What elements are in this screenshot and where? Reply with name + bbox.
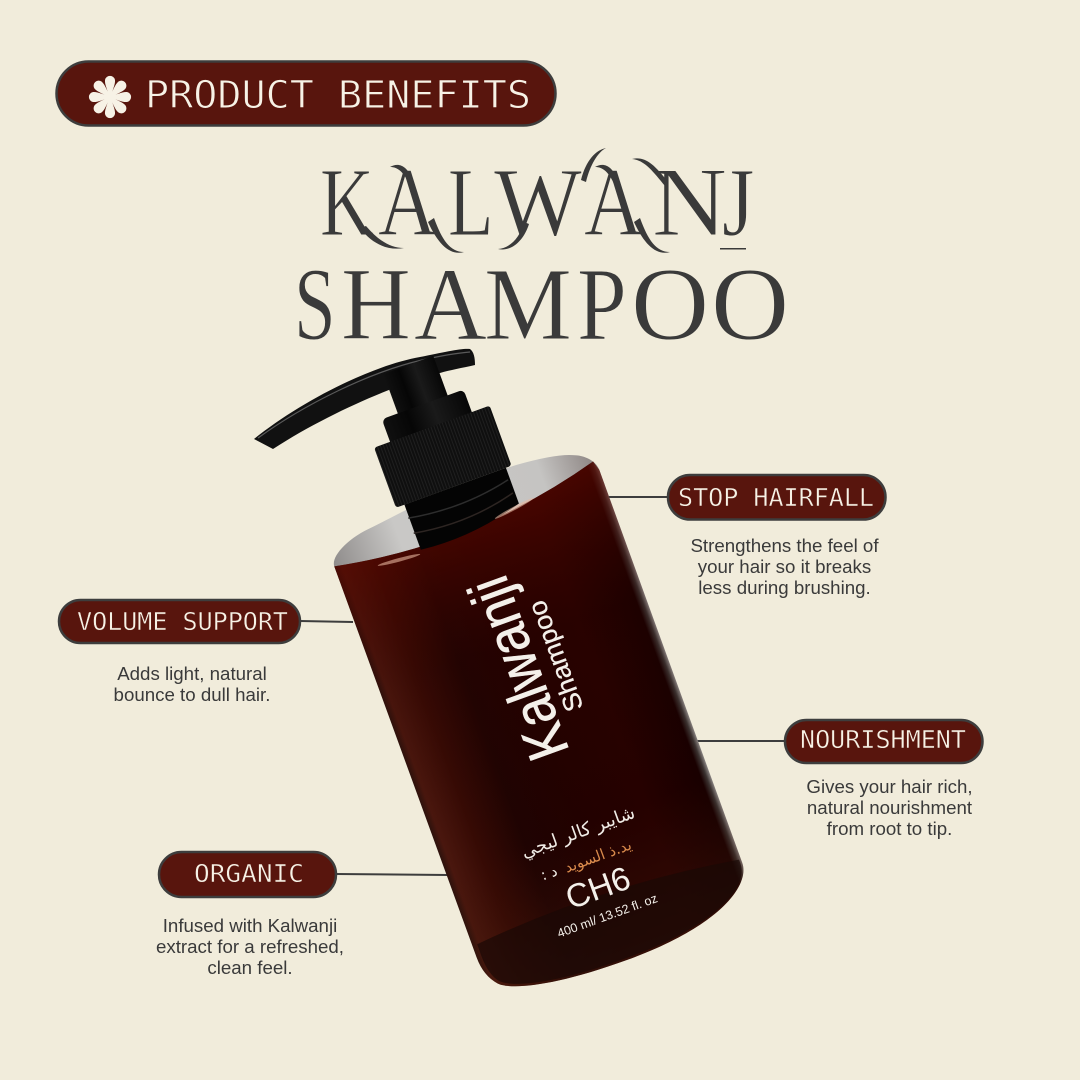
product: shampoo bottle: [254, 316, 760, 1008]
benefit: stop hairfall: Strengthens the feel of: [690, 535, 879, 556]
shoulder highlights: [373, 496, 539, 571]
benefit: volume support: VOLUME SUPPORT: [77, 607, 288, 636]
title line: Shampoo: O: [631, 246, 709, 362]
label: arabic subtitle: يد.ذ السويد: [562, 836, 634, 876]
bottle shoulder: [323, 438, 605, 581]
label: arabic name: شايبر كالر ليجي: [518, 802, 638, 863]
benefit: stop hairfall: [668, 475, 886, 598]
benefit: organic: clean feel.: [207, 957, 293, 978]
benefit: organic: Infused with Kalwanji: [163, 915, 337, 936]
benefit: volume support: bounce to dull hair.: [114, 684, 270, 705]
benefit: organic: [156, 852, 344, 978]
benefit: stop hairfall: your hair so it breaks: [698, 556, 871, 577]
title line: Shampoo: M: [484, 247, 572, 362]
label: volume: 400 ml/ 13.52 fl. oz: [555, 891, 659, 941]
benefit: nourishment: [785, 720, 982, 839]
label: arabic mark: : د: [538, 862, 560, 884]
pump actuator: [254, 349, 475, 449]
label: CH6: CH6: [560, 859, 635, 916]
title line: Shampoo: A: [414, 248, 487, 362]
title swashes: [360, 148, 746, 253]
header text: PRODUCT BENEFITS: [145, 73, 531, 117]
benefit: volume support: Adds light, natural: [117, 663, 267, 684]
title line: Shampoo: O: [711, 246, 789, 362]
benefit: stop hairfall: less during brushing.: [698, 577, 871, 598]
benefit: nourishment: natural nourishment: [807, 797, 973, 818]
pump neck: [403, 468, 523, 552]
title line: Kalwanj: L: [448, 147, 493, 256]
title line: Kalwanj: [320, 147, 754, 257]
benefit: nourishment: Gives your hair rich,: [806, 776, 973, 797]
body tint: [331, 461, 760, 1008]
pump stem and collar: [351, 344, 512, 508]
title line: Kalwanj: A: [378, 147, 437, 257]
title: [294, 147, 789, 362]
title line: Kalwanj: J: [722, 148, 754, 257]
label: Kalwanji: Kalwanji: [456, 568, 582, 769]
title line: Kalwanj: K: [320, 147, 374, 256]
icon: flower: [89, 76, 131, 118]
title line: Kalwanj: W: [494, 148, 583, 257]
title line: Shampoo: S: [294, 246, 336, 362]
benefit: organic: ORGANIC: [194, 859, 304, 888]
benefit: organic: extract for a refreshed,: [156, 936, 344, 957]
benefit: volume support: [59, 600, 300, 705]
header badge: product benefits: [56, 62, 556, 126]
title line: Kalwanj: A: [584, 147, 643, 257]
title line: Shampoo: [294, 246, 789, 362]
label: Shampoo: Shampoo: [521, 597, 589, 716]
benefit: nourishment: from root to tip.: [827, 818, 952, 839]
bottle base shadow: [476, 846, 757, 1004]
benefit: stop hairfall: STOP HAIRFALL: [678, 483, 874, 512]
title line: Kalwanj: N: [652, 148, 727, 256]
benefit: nourishment: NOURISHMENT: [800, 725, 966, 754]
title line: Shampoo: P: [577, 247, 627, 362]
bottle body: [331, 461, 760, 1008]
title line: Shampoo: H: [341, 247, 411, 362]
connector lines: [300, 497, 785, 875]
